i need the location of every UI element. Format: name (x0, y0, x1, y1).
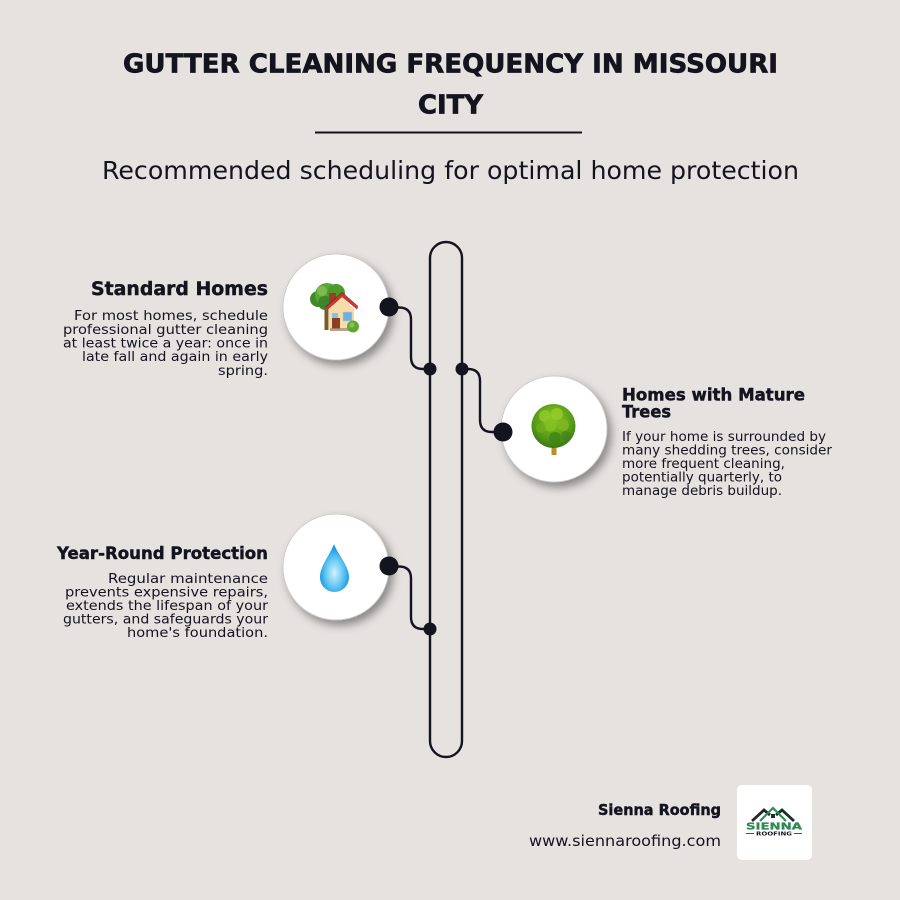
connector dot (380, 556, 398, 576)
text block: homes with mature trees: many shedding trees, consider (622, 444, 833, 458)
icon: house with tree (310, 283, 359, 332)
connector line (462, 369, 503, 432)
text block: homes with mature trees: more frequent cleaning, (622, 457, 785, 472)
icon: water drop (320, 544, 349, 592)
timeline track (430, 242, 462, 757)
title (123, 50, 778, 120)
heading: year-round protection: Year-Round Protection (56, 544, 268, 564)
text block: homes with mature trees: manage debris buildup. (622, 484, 782, 499)
icon: tree (532, 404, 576, 455)
connector node (424, 362, 436, 376)
logo tagline rules (746, 832, 802, 834)
text block: year-round protection: prevents expensive repairs, (65, 586, 268, 600)
subtitle: Recommended scheduling for optimal home protection (102, 156, 799, 185)
logo card (737, 785, 812, 860)
text block: year-round protection: home's foundation. (127, 626, 268, 641)
text block: year-round protection: Regular maintenance (108, 572, 268, 587)
panel: homes with mature trees (456, 362, 833, 499)
title underline (315, 132, 582, 134)
text block: standard homes: at least twice a year: once in (63, 336, 268, 352)
text block: standard homes (63, 309, 268, 379)
text block: homes with mature trees: If your home is surrounded by (622, 430, 826, 445)
icon circle (283, 254, 389, 360)
text block: standard homes: late fall and again in early (82, 350, 268, 365)
connector node (424, 622, 436, 636)
footer: company name: Sienna Roofing (598, 801, 721, 819)
title: GUTTER CLEANING FREQUENCY IN MISSOURI (123, 50, 778, 80)
heading: homes with mature trees: Homes with Mature (622, 386, 805, 406)
text block: standard homes: professional gutter cleaning (63, 323, 268, 338)
logo tagline: ROOFING (756, 832, 792, 838)
text block: year-round protection: gutters, and safeguards your (63, 612, 269, 628)
connector dot (380, 298, 398, 316)
connector line (389, 308, 430, 369)
connector line (389, 566, 430, 629)
text block: homes with mature trees: potentially quarterly, to (622, 470, 782, 486)
text block: homes with mature trees (622, 430, 833, 499)
icon circle (283, 514, 389, 620)
heading: homes with mature trees: Trees (622, 402, 671, 422)
panel: standard homes (63, 254, 436, 379)
text block: year-round protection: extends the lifespan of your (66, 599, 269, 614)
connector dot (494, 422, 512, 442)
text block: standard homes: spring. (218, 364, 268, 379)
icon: logo roof (752, 808, 794, 821)
footer: website: www.siennaroofing.com (529, 832, 721, 850)
text block: year-round protection (63, 572, 269, 641)
text block: standard homes: For most homes, schedule (74, 309, 268, 324)
icon circle (501, 376, 607, 482)
panel: year-round protection (56, 514, 436, 641)
logo wordmark: SIENNA (746, 822, 802, 832)
connector node (456, 362, 468, 376)
title: CITY (418, 90, 484, 120)
heading: standard homes: Standard Homes (91, 278, 268, 300)
heading: homes with mature trees (622, 386, 805, 422)
